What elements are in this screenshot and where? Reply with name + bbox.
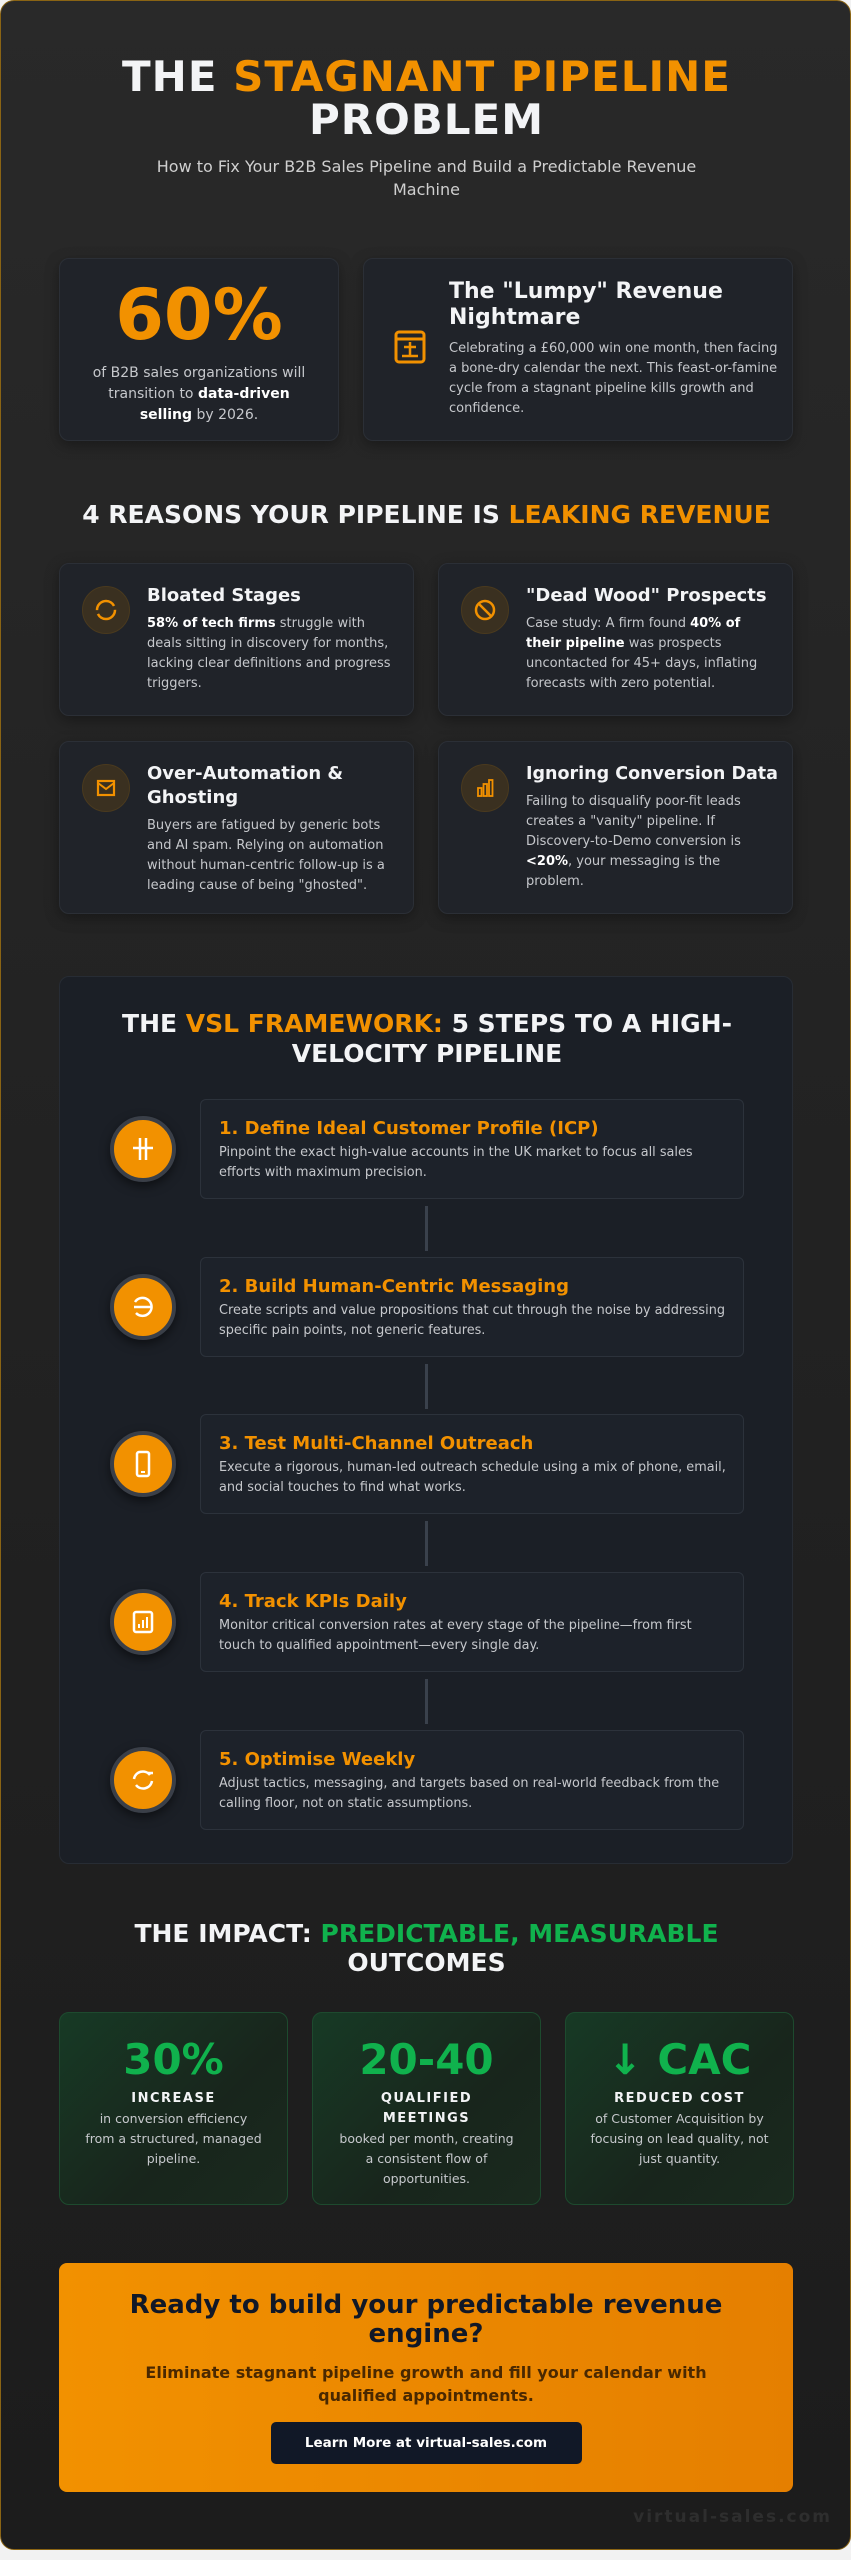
impact card: 30%: INCREASE <box>131 2091 216 2106</box>
step 5 icon <box>110 1747 176 1813</box>
reason text <box>526 585 767 691</box>
panel: VSL framework <box>59 976 793 1864</box>
CTA button <box>270 2422 582 2464</box>
reason text <box>526 764 778 889</box>
lumpy title: The "Lumpy" Revenue Nightmare <box>449 279 723 330</box>
icon: bars <box>461 764 509 812</box>
impact card: 20-40: booked per month, creating a consistent flow of opportunities. <box>339 2131 514 2186</box>
stat number: 60% <box>115 274 283 356</box>
step 5 card: Adjust tactics, messaging, and targets based on real-world feedback from the calling floor, not on static assumptions. <box>219 1776 719 1811</box>
impact card: 30%: in conversion efficiency from a structured, managed pipeline. <box>85 2111 262 2166</box>
step 2 card: Create scripts and value propositions that cut through the noise by addressing specific pain points, not generic features. <box>219 1303 725 1338</box>
reason card: conversion data <box>438 741 793 914</box>
CTA text: Eliminate stagnant pipeline growth and fill your calendar with qualified appointments. <box>145 2363 707 2405</box>
reason text <box>147 763 385 893</box>
reason text: "Dead Wood" Prospects <box>526 585 767 606</box>
reason text: Ignoring Conversion Data <box>526 764 778 784</box>
impact card: 20-40: QUALIFIED MEETINGS <box>381 2091 472 2126</box>
reason text: 58% of tech firms struggle with deals sitting in discovery for months, lacking clear definitions and progress triggers. <box>147 616 390 691</box>
icon: mail <box>82 764 130 812</box>
impact card: CAC: ↓ CAC <box>608 2035 751 2084</box>
title: THE STAGNANT PIPELINE <box>122 52 731 101</box>
step 5 card <box>200 1730 744 1830</box>
step 1 icon <box>110 1116 176 1182</box>
footer watermark: virtual-sales.com <box>633 2507 832 2527</box>
impact card: 30%: 30% <box>123 2035 224 2084</box>
CTA button: Learn More at virtual-sales.com <box>305 2435 547 2451</box>
impact card: 20-40 <box>312 2012 541 2205</box>
step 2 icon <box>110 1274 176 1340</box>
lumpy body: Celebrating a £60,000 win one month, then facing a bone-dry calendar the next. This feast-or-famine cycle from a stagnant pipeline kills growth and confidence. <box>449 341 777 416</box>
reason text: Failing to disqualify poor-fit leads creates a "vanity" pipeline. If Discovery-to-Demo conversion is <20%, your messaging is the problem. <box>526 794 741 889</box>
impact card: CAC: REDUCED COST <box>614 2091 745 2106</box>
reason text: Buyers are fatigued by generic bots and AI spam. Relying on automation without human-centric follow-up is a leading cause of being "ghosted". <box>147 818 385 893</box>
step 4 icon <box>110 1589 176 1655</box>
step 2 card <box>200 1257 744 1357</box>
icon: cycle <box>82 586 130 634</box>
impact card: 30% <box>59 2012 288 2205</box>
step 4 card: 4. Track KPIs Daily <box>219 1591 407 1612</box>
reason text: Bloated Stages <box>147 585 301 606</box>
card: lumpy revenue <box>363 258 793 441</box>
reason card: over-automation <box>59 741 414 914</box>
step 2 card: 2. Build Human-Centric Messaging <box>219 1276 569 1297</box>
step 4 card <box>200 1572 744 1672</box>
impact card: CAC: of Customer Acquisition by focusing on lead quality, not just quantity. <box>590 2111 769 2166</box>
step 3 card <box>200 1414 744 1514</box>
title <box>122 52 731 144</box>
icon: calendar <box>394 330 426 364</box>
reason text: Case study: A firm found 40% of their pipeline was prospects uncontacted for 45+ days, inflating forecasts with zero potential. <box>526 616 757 691</box>
section heading: reasons: 4 REASONS YOUR PIPELINE IS LEAKING REVENUE <box>82 500 771 529</box>
reason card: bloated stages <box>59 563 414 716</box>
icon: ban <box>461 586 509 634</box>
CTA panel <box>59 2263 793 2492</box>
framework heading: THE VSL FRAMEWORK: 5 STEPS TO A HIGH-VELOCITY PIPELINE <box>122 1009 732 1068</box>
title: PROBLEM <box>309 95 544 144</box>
step 1 card <box>200 1099 744 1199</box>
step 3 card: 3. Test Multi-Channel Outreach <box>219 1433 533 1454</box>
stat text: of B2B sales organizations will transition to data-driven selling by 2026. <box>93 365 305 423</box>
stat card: 60% <box>59 258 339 441</box>
reason card: dead wood <box>438 563 793 716</box>
subtitle: How to Fix Your B2B Sales Pipeline and Build a Predictable Revenue Machine <box>157 157 696 199</box>
step 1 card: 1. Define Ideal Customer Profile (ICP) <box>219 1118 599 1139</box>
step 3 icon <box>110 1431 176 1497</box>
step 1 card: Pinpoint the exact high-value accounts in the UK market to focus all sales efforts with maximum precision. <box>219 1145 693 1180</box>
step 3 card: Execute a rigorous, human-led outreach schedule using a mix of phone, email, and social touches to find what works. <box>219 1460 726 1495</box>
step 4 card: Monitor critical conversion rates at every stage of the pipeline—from first touch to qualified appointment—every single day. <box>219 1618 692 1653</box>
impact heading: THE IMPACT: PREDICTABLE, MEASURABLE OUTCOMES <box>134 1919 719 1977</box>
impact card: 20-40: 20-40 <box>359 2035 494 2084</box>
reason text: Over-Automation & Ghosting <box>147 763 343 808</box>
impact card: CAC <box>565 2012 794 2205</box>
step 5 card: 5. Optimise Weekly <box>219 1749 415 1770</box>
connector lines <box>425 1206 428 1251</box>
CTA heading: Ready to build your predictable revenue engine? <box>130 2290 722 2349</box>
